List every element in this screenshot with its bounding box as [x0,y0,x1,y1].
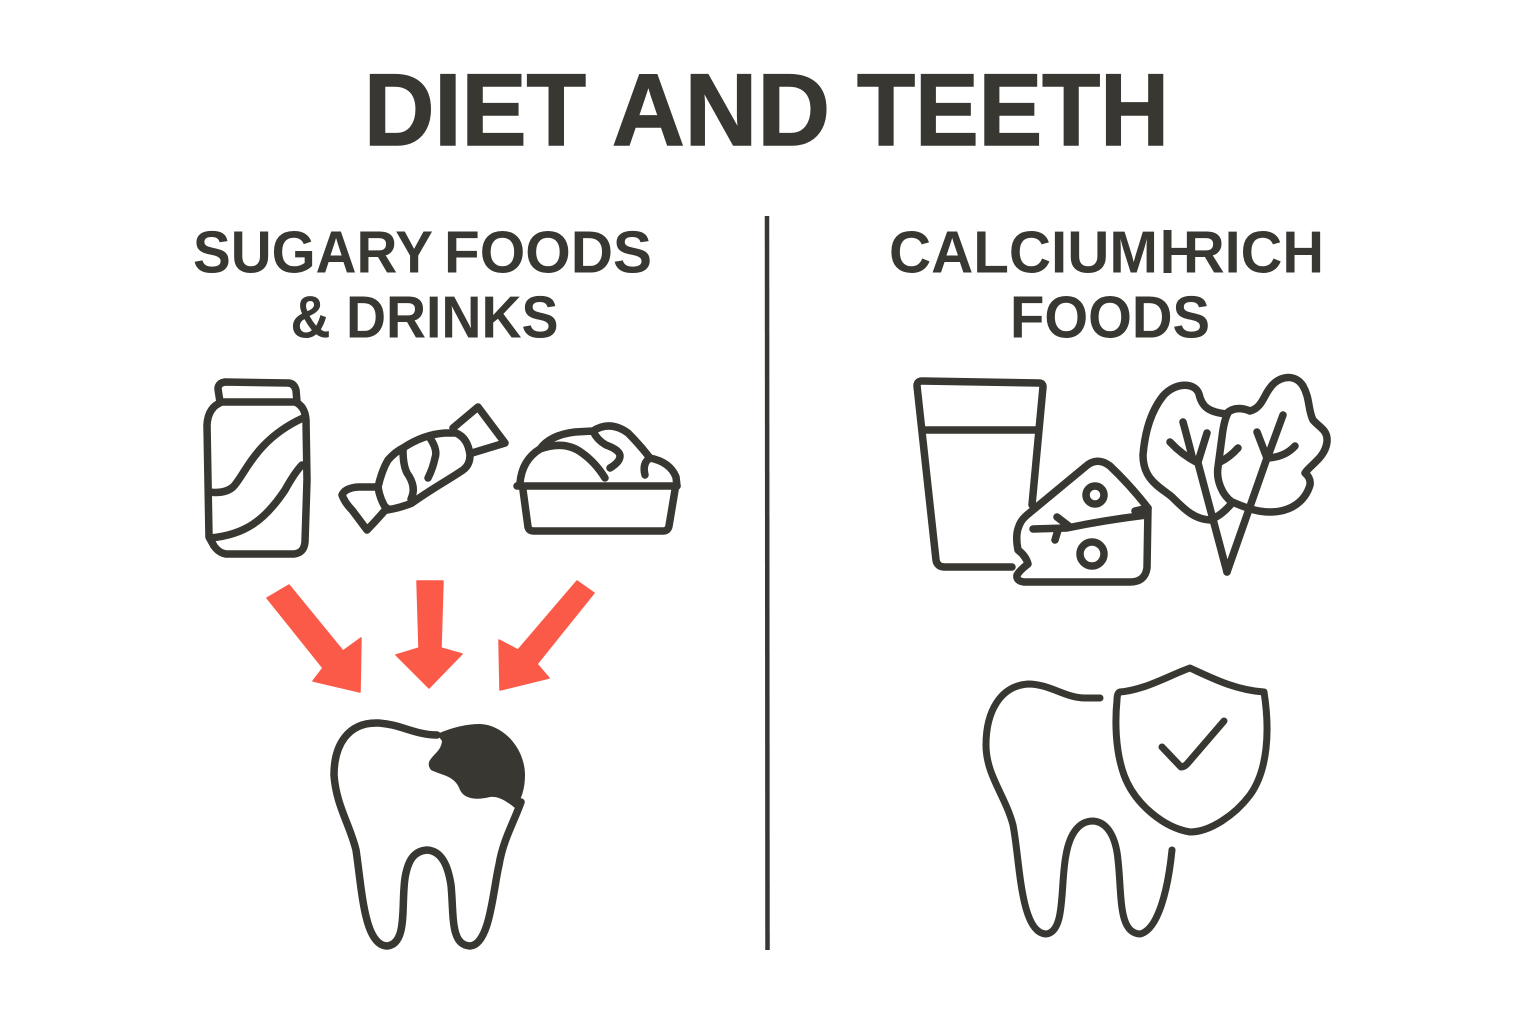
icon: soda can [207,382,307,554]
arrow: center [396,581,462,688]
title: DIET [364,53,586,167]
icon: protected tooth [986,668,1267,934]
title: AND [612,53,830,167]
arrow: left [267,585,361,692]
heading: calcium-rich foods [889,214,1324,350]
icon: candy [342,407,505,530]
heading: sugary foods: SUGARY [193,220,433,286]
icon: decayed tooth [334,723,525,946]
title [364,53,1169,167]
heading: calcium-rich foods: - [1161,214,1191,280]
icon: glass of milk [917,381,1043,567]
heading: calcium-rich foods: RICH [1183,220,1324,286]
icon: cheese [1017,461,1148,582]
heading: calcium-rich foods: CALCIUM [889,220,1158,286]
icon: dessert bowl [517,426,677,531]
heading: sugary foods: & DRINKS [290,284,558,350]
icon: spinach leaves [1143,378,1327,572]
arrow: right [499,581,594,690]
heading: calcium-rich foods: FOODS [1010,284,1210,350]
heading: sugary foods: FOODS [444,220,652,286]
title: TEETH [857,53,1169,167]
divider line [765,216,770,950]
heading: sugary foods [193,220,652,350]
